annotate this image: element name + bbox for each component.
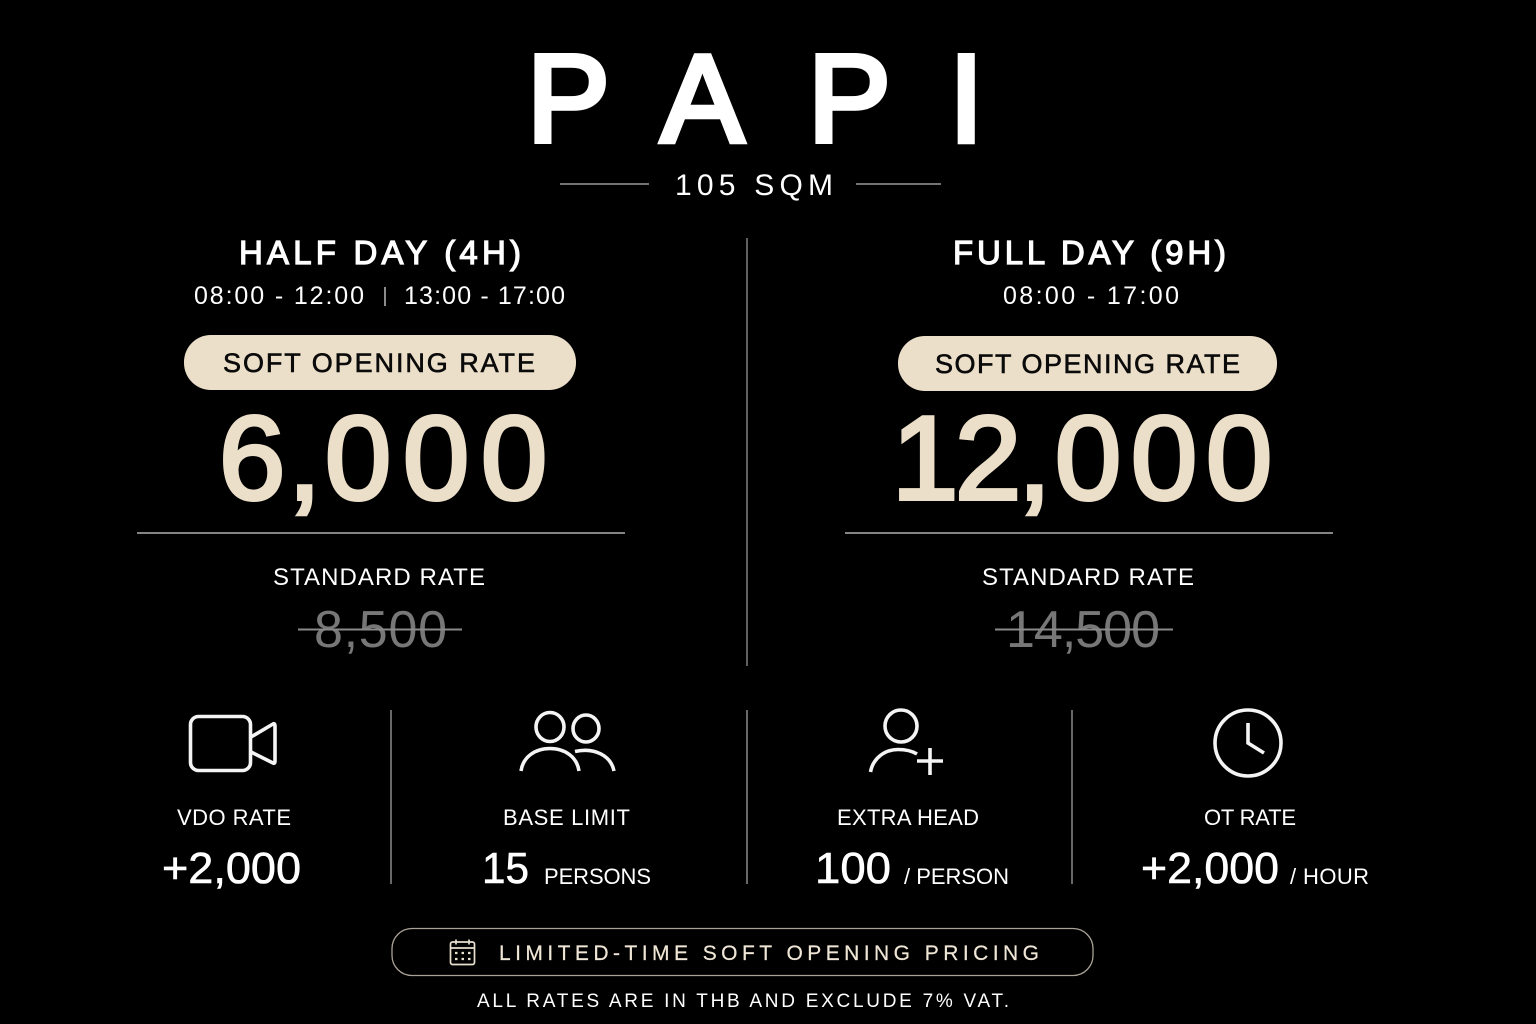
ot value: +2,000 [1141, 844, 1279, 893]
extra head value: 100 [815, 844, 891, 893]
half day hours: 08:00 - 12:00 [194, 282, 364, 310]
half day hours: 13:00 - 17:00 [404, 282, 565, 310]
icon: clock [1215, 710, 1281, 776]
panel: full day [845, 234, 1333, 659]
vdo value: +2,000 [162, 844, 301, 893]
feature: vdo rate [162, 716, 301, 893]
soft opening badge [184, 335, 576, 390]
icon: two people [521, 712, 614, 771]
soft opening badge: SOFT OPENING RATE [223, 348, 535, 378]
standard rate label: STANDARD RATE [982, 564, 1194, 591]
icon: add person [870, 710, 943, 775]
ot value: / HOUR [1290, 864, 1369, 889]
full day price: 12,000 [892, 392, 1272, 525]
panel: half day [137, 234, 625, 659]
icon: video camera [190, 716, 275, 770]
half day price: 6,000 [219, 392, 547, 525]
extra head value: / PERSON [904, 864, 1009, 889]
extra head label: EXTRA HEAD [837, 805, 979, 830]
title: PAPI [527, 30, 983, 168]
soft opening badge: SOFT OPENING RATE [935, 349, 1240, 379]
full day heading: FULL DAY (9H) [953, 234, 1226, 271]
base limit value: 15 [482, 844, 529, 893]
half day heading: HALF DAY (4H) [239, 234, 521, 271]
icon: calendar [450, 940, 474, 964]
base limit label: BASE LIMIT [503, 805, 630, 830]
header [527, 30, 983, 202]
base limit value [482, 844, 651, 893]
standard rate label: STANDARD RATE [273, 564, 485, 591]
limited-time notice [392, 928, 1093, 976]
feature: ot rate [1141, 710, 1369, 893]
feature: base limit [482, 712, 651, 893]
ot value [1141, 844, 1369, 893]
notice text: LIMITED-TIME SOFT OPENING PRICING [499, 942, 1039, 965]
half day hours [194, 282, 565, 310]
soft opening badge [898, 336, 1277, 391]
subtitle: 105 SQM [675, 169, 833, 202]
feature: extra head [815, 710, 1009, 893]
base limit value: PERSONS [544, 864, 651, 889]
footnote: ALL RATES ARE IN THB AND EXCLUDE 7% VAT. [477, 991, 1009, 1012]
ot label: OT RATE [1204, 805, 1296, 830]
struck standard price: 8,500 [314, 601, 447, 659]
extra head value [815, 844, 1009, 893]
vdo label: VDO RATE [177, 805, 291, 830]
struck standard price: 14,500 [1006, 601, 1160, 659]
full day hours: 08:00 - 17:00 [1003, 282, 1179, 310]
